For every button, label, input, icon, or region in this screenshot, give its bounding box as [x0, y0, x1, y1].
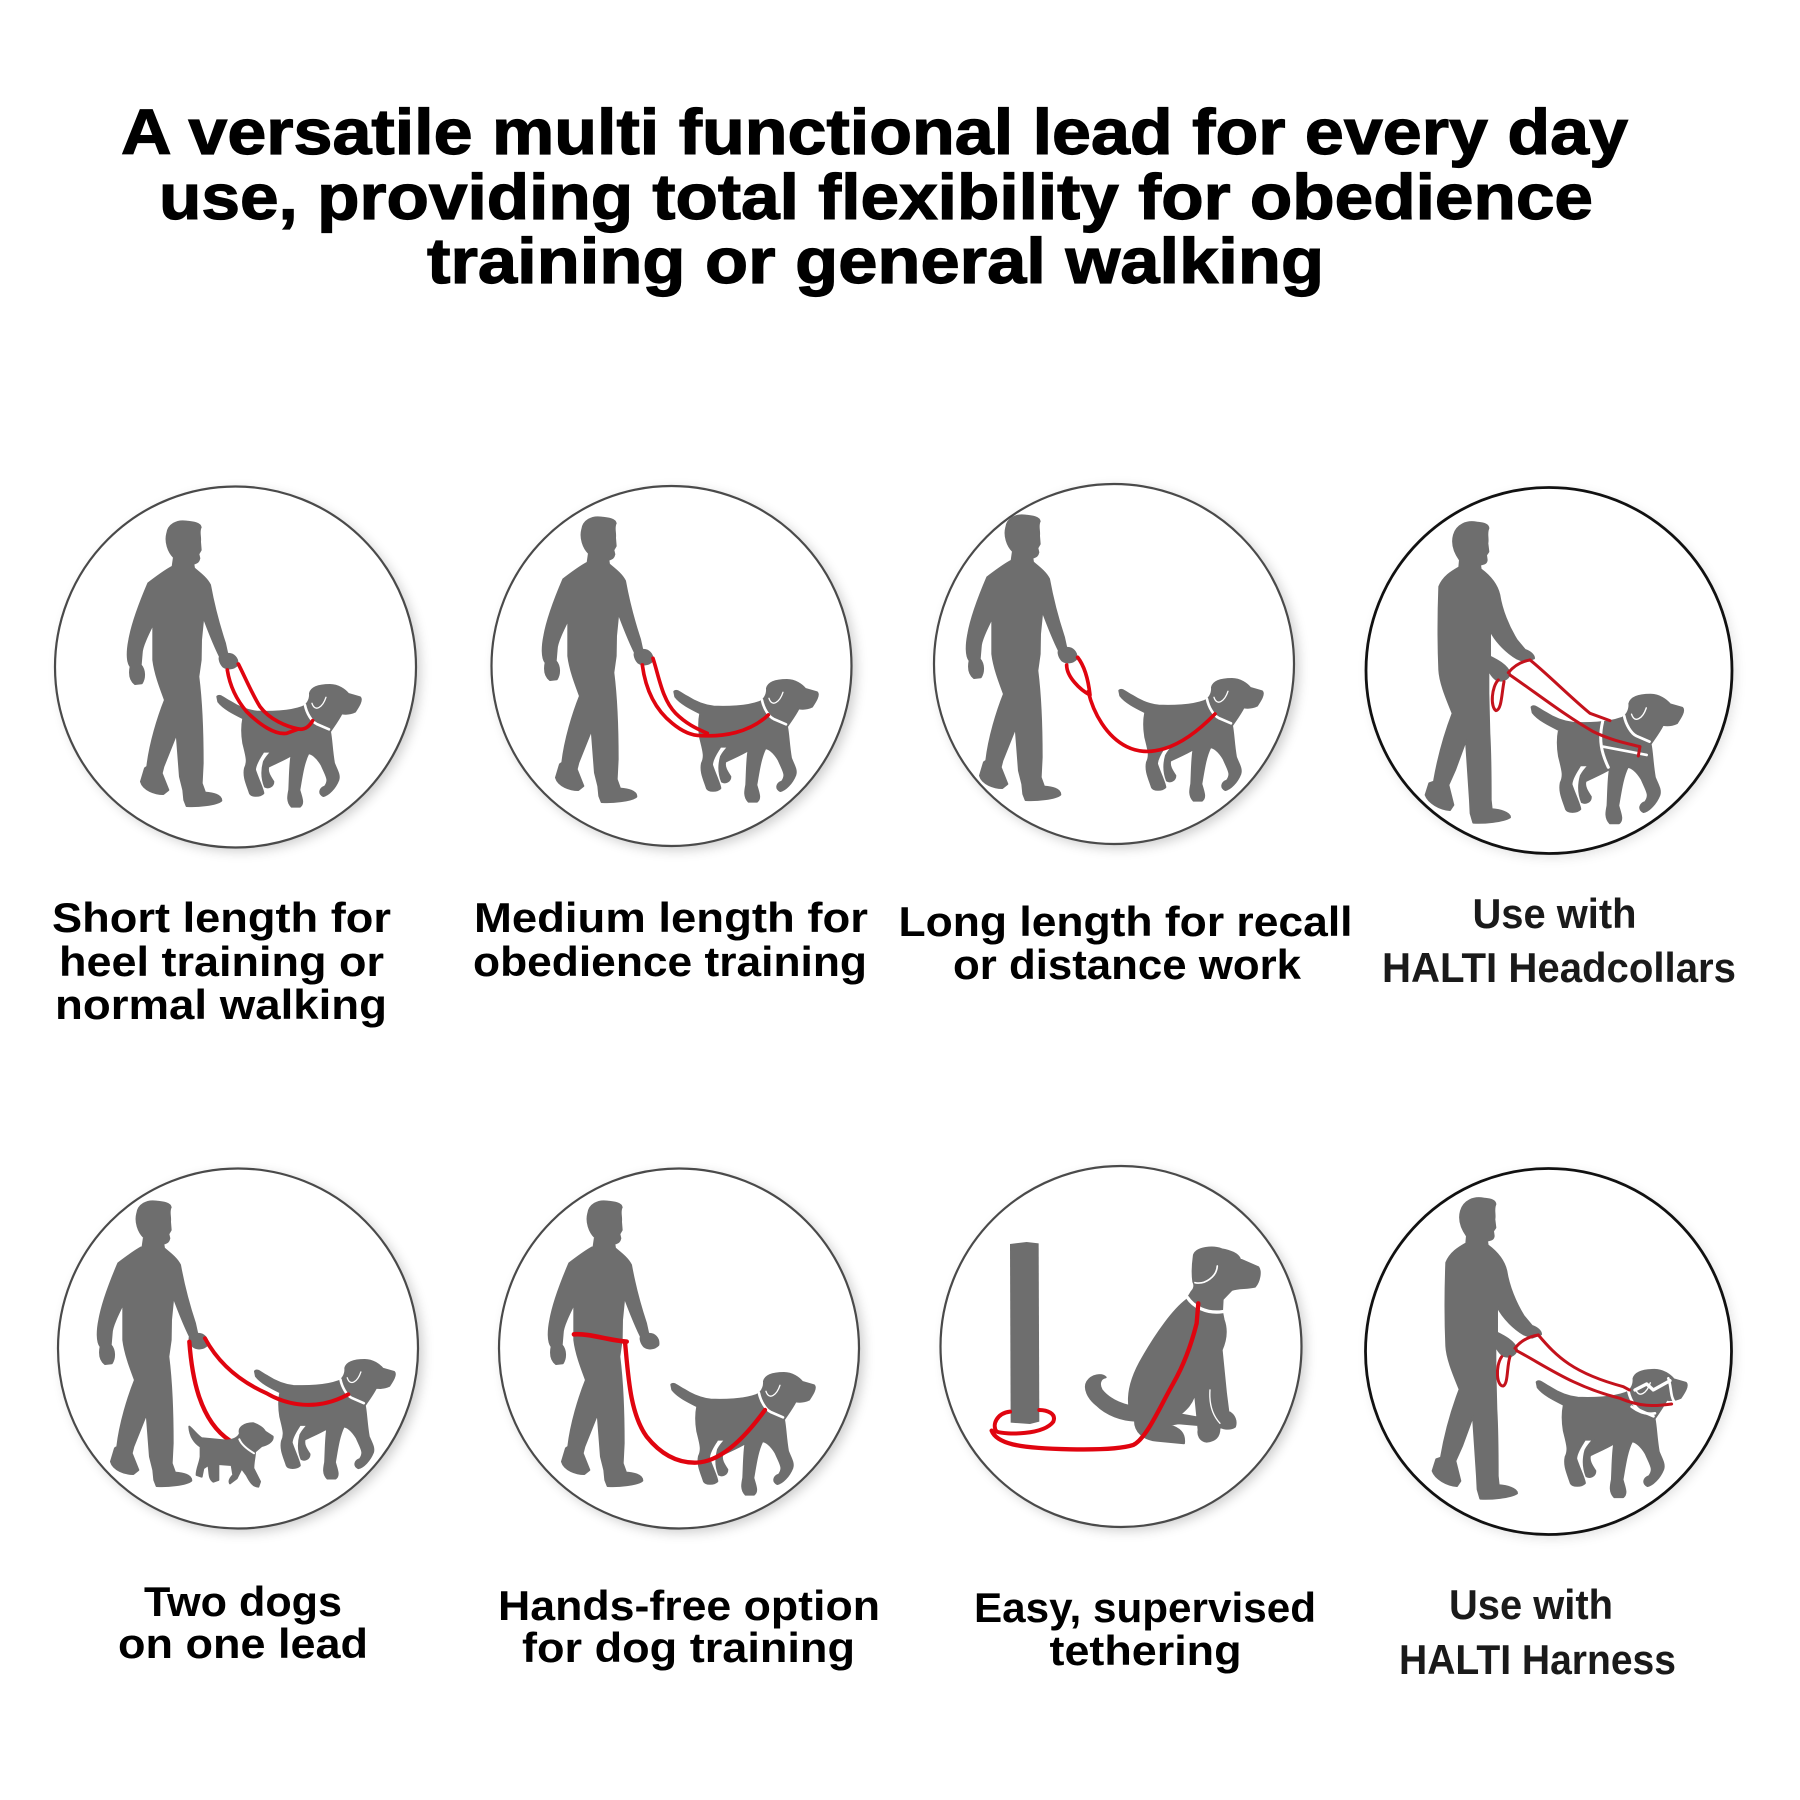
icon: red lead [574, 1334, 765, 1463]
icon: red lead [1067, 657, 1215, 751]
caption: heel training or [59, 938, 384, 985]
caption: for dog training [522, 1624, 855, 1671]
circle badge [934, 484, 1298, 848]
panel: long length [898, 484, 1352, 988]
caption [473, 894, 868, 985]
circle badge [58, 1168, 422, 1532]
icon: red lead [642, 658, 768, 736]
circle badge [1366, 488, 1735, 857]
caption [118, 1578, 368, 1667]
circle badge [940, 1166, 1306, 1530]
icon: red lead [1497, 1335, 1675, 1414]
icon: red lead [189, 1338, 348, 1441]
title [121, 96, 1628, 297]
caption: HALTI Headcollars [1382, 944, 1736, 991]
circle badge [492, 486, 856, 850]
caption: or distance work [953, 941, 1302, 988]
icon: dog [217, 685, 361, 807]
icon: man [1426, 522, 1534, 823]
icon: dog [1537, 1370, 1687, 1497]
panel: headcollars [1366, 488, 1736, 991]
title: A versatile multi functional lead for every day [121, 96, 1628, 168]
caption: Long length for recall [898, 898, 1352, 945]
caption: Use with [1449, 1581, 1613, 1628]
caption: HALTI Harness [1399, 1636, 1676, 1683]
caption: obedience training [473, 938, 867, 985]
panel: short length [52, 486, 420, 1028]
caption: Two dogs [144, 1578, 342, 1625]
circle badge [1366, 1168, 1734, 1538]
caption: Easy, supervised [974, 1584, 1316, 1631]
icon: dog [671, 1373, 815, 1495]
icon: large dog [255, 1360, 395, 1479]
icon: man [543, 517, 652, 802]
icon: sitting dog [1086, 1248, 1260, 1443]
caption [1399, 1581, 1676, 1683]
icon: post [1010, 1242, 1039, 1424]
icon: red lead [227, 664, 313, 733]
panel: hands-free [498, 1168, 880, 1671]
caption: Medium length for [474, 894, 868, 941]
circle badge [55, 486, 420, 851]
panel: two dogs [58, 1168, 422, 1667]
caption: Hands-free option [498, 1582, 880, 1629]
caption: Use with [1472, 890, 1636, 937]
icon: dog [674, 680, 818, 802]
circle badge [499, 1168, 864, 1532]
icon: man [549, 1201, 658, 1486]
caption [974, 1584, 1316, 1674]
icon: dog [1532, 695, 1683, 823]
icon: dog [1119, 679, 1263, 801]
caption: tethering [1050, 1627, 1242, 1674]
panel: tethering [940, 1166, 1316, 1674]
panel: harness [1366, 1168, 1734, 1683]
icon: man [98, 1201, 207, 1486]
caption [52, 894, 391, 1028]
caption [1382, 890, 1736, 991]
title: use, providing total flexibility for obedience [159, 161, 1593, 233]
icon: man [1433, 1198, 1541, 1499]
caption [898, 898, 1352, 988]
caption: Short length for [52, 894, 391, 941]
panel: medium length [473, 486, 868, 985]
icon: small dog [189, 1423, 273, 1487]
caption [498, 1582, 880, 1671]
icon: red lead [1492, 660, 1647, 767]
icon: man [128, 521, 237, 806]
icon: red lead [992, 1303, 1198, 1449]
caption: normal walking [55, 981, 387, 1028]
title: training or general walking [427, 225, 1324, 297]
caption: on one lead [118, 1620, 368, 1667]
icon: man [967, 515, 1076, 800]
